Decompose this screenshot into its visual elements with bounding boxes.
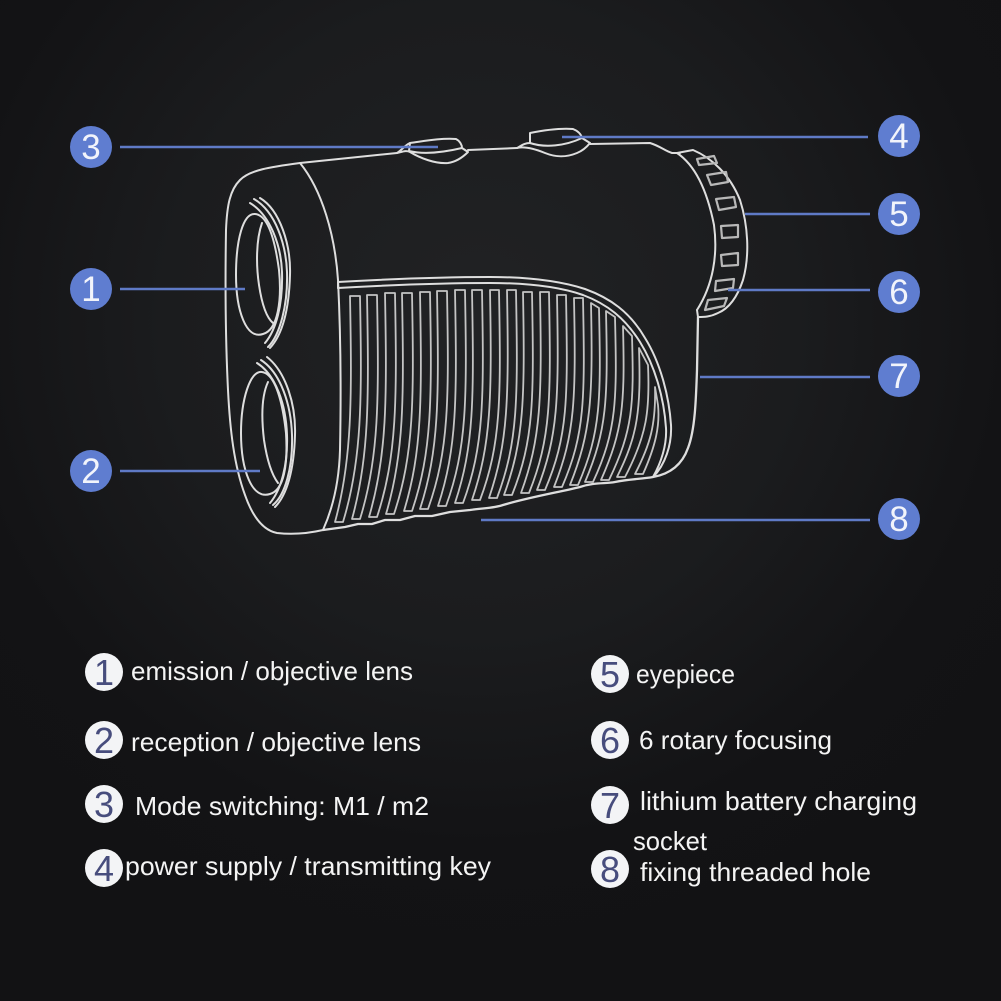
legend item 4 xyxy=(85,848,491,889)
badge 3 xyxy=(70,126,112,168)
legend item 6 xyxy=(591,720,832,761)
badge 7 xyxy=(878,355,920,397)
legend item 1: 1 xyxy=(94,652,114,693)
blue number badges xyxy=(70,115,920,540)
power button xyxy=(517,129,590,156)
legend item 3: 3 xyxy=(94,784,114,825)
legend item 4: power supply / transmitting key xyxy=(125,851,491,881)
legend item 5: eyepiece xyxy=(636,659,735,689)
legend item 5: 5 xyxy=(600,654,620,695)
legend item 7: 7 xyxy=(600,785,620,826)
legend item 7 xyxy=(591,785,917,856)
legend item 1 xyxy=(85,652,413,693)
badge 6: 6 xyxy=(889,273,909,312)
badge 7: 7 xyxy=(889,357,909,396)
badge 8: 8 xyxy=(889,500,909,539)
leader lines xyxy=(120,137,870,520)
grip panel xyxy=(338,277,671,477)
legend item 6: 6 xyxy=(600,720,620,761)
legend item 3 xyxy=(85,784,429,825)
badge 8 xyxy=(878,498,920,540)
legend item 8: fixing threaded hole xyxy=(640,857,871,887)
body outline xyxy=(226,143,698,534)
legend item 4: 4 xyxy=(94,848,114,889)
legend item 3: Mode switching: M1 / m2 xyxy=(135,791,429,821)
mode button xyxy=(397,139,468,163)
badge 5 xyxy=(878,193,920,235)
badge 3: 3 xyxy=(81,128,101,167)
badge 1: 1 xyxy=(81,270,101,309)
legend item 8 xyxy=(591,849,871,890)
legend item 1: emission / objective lens xyxy=(131,656,413,686)
legend item 2: 2 xyxy=(94,720,114,761)
legend item 2: reception / objective lens xyxy=(131,727,421,757)
legend item 8: 8 xyxy=(600,849,620,890)
lower objective lens xyxy=(241,357,295,507)
badge 4: 4 xyxy=(889,117,909,156)
legend item 2 xyxy=(85,720,421,761)
badge 6 xyxy=(878,271,920,313)
badge 1 xyxy=(70,268,112,310)
legend item 6: 6 rotary focusing xyxy=(639,725,832,755)
legend: right column xyxy=(591,654,917,890)
eyepiece focus ring xyxy=(677,150,747,317)
badge 2: 2 xyxy=(81,452,101,491)
badge 5: 5 xyxy=(889,195,909,234)
badge 2 xyxy=(70,450,112,492)
badge 4 xyxy=(878,115,920,157)
legend item 7: lithium battery charging xyxy=(640,786,917,816)
legend item 5 xyxy=(591,654,735,695)
legend item 7: socket xyxy=(633,826,708,856)
legend: left column xyxy=(85,652,491,889)
upper objective lens xyxy=(236,198,290,348)
rangefinder line drawing xyxy=(226,129,747,534)
grip ribs xyxy=(335,290,658,522)
